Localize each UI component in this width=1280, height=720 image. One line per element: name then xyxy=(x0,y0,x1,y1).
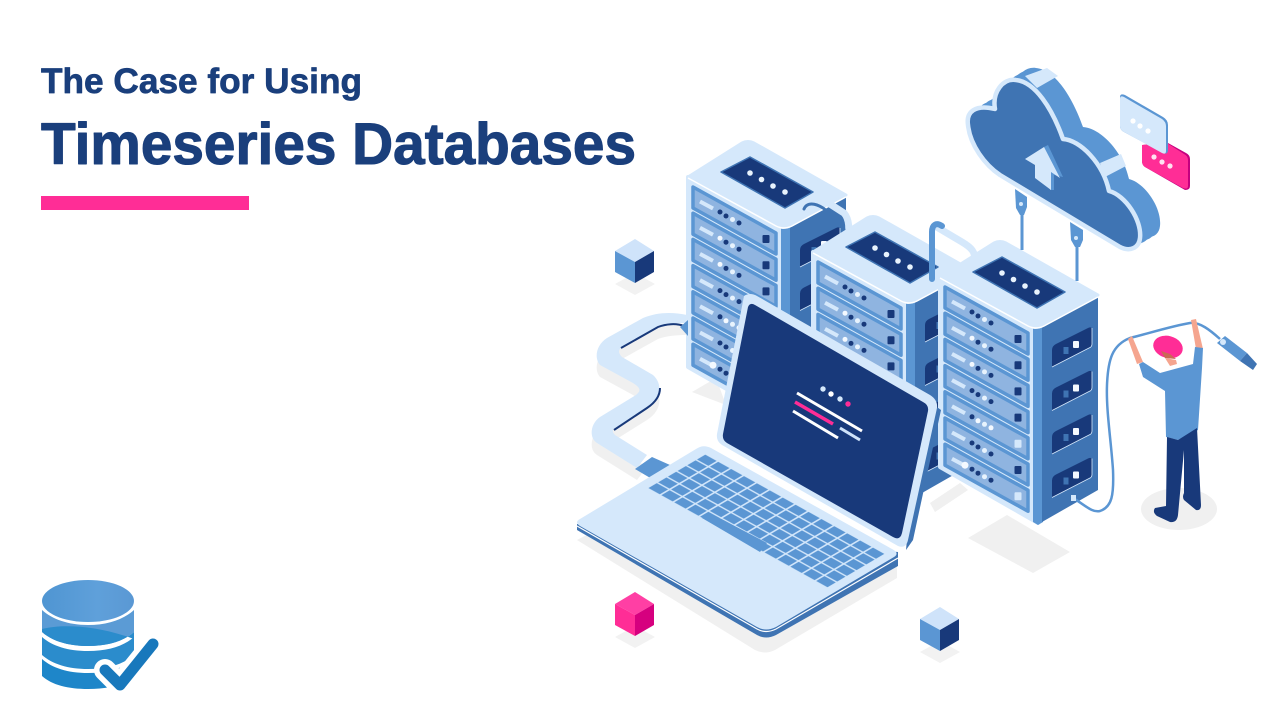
server rack: middle xyxy=(813,216,971,500)
pink accent bar xyxy=(41,196,249,210)
cube: top left xyxy=(615,239,655,295)
laptop base xyxy=(577,446,898,638)
laptop lid xyxy=(717,294,941,550)
cube: bottom right xyxy=(920,607,960,663)
title: Timeseries Databases: Timeseries Databases xyxy=(41,112,636,177)
server rack: left xyxy=(688,142,846,425)
cloud with upload arrow xyxy=(968,68,1160,281)
cable between middle and right racks xyxy=(932,224,975,279)
laptop xyxy=(577,294,941,638)
icon: database with check mark xyxy=(42,580,153,689)
floor shadows xyxy=(577,325,1217,652)
cube: pink xyxy=(615,592,655,648)
laptop keyboard xyxy=(647,454,885,588)
title: The Case for Using: The Case for Using xyxy=(41,62,362,101)
chat bubbles xyxy=(1120,94,1190,190)
laptop screen content xyxy=(793,386,862,440)
server rack: right xyxy=(940,242,1098,525)
illustration: isometric data center xyxy=(577,68,1257,663)
cable from server to laptop xyxy=(592,313,688,479)
person pulling a cable xyxy=(1071,319,1257,522)
cable between left and middle racks xyxy=(804,199,849,238)
